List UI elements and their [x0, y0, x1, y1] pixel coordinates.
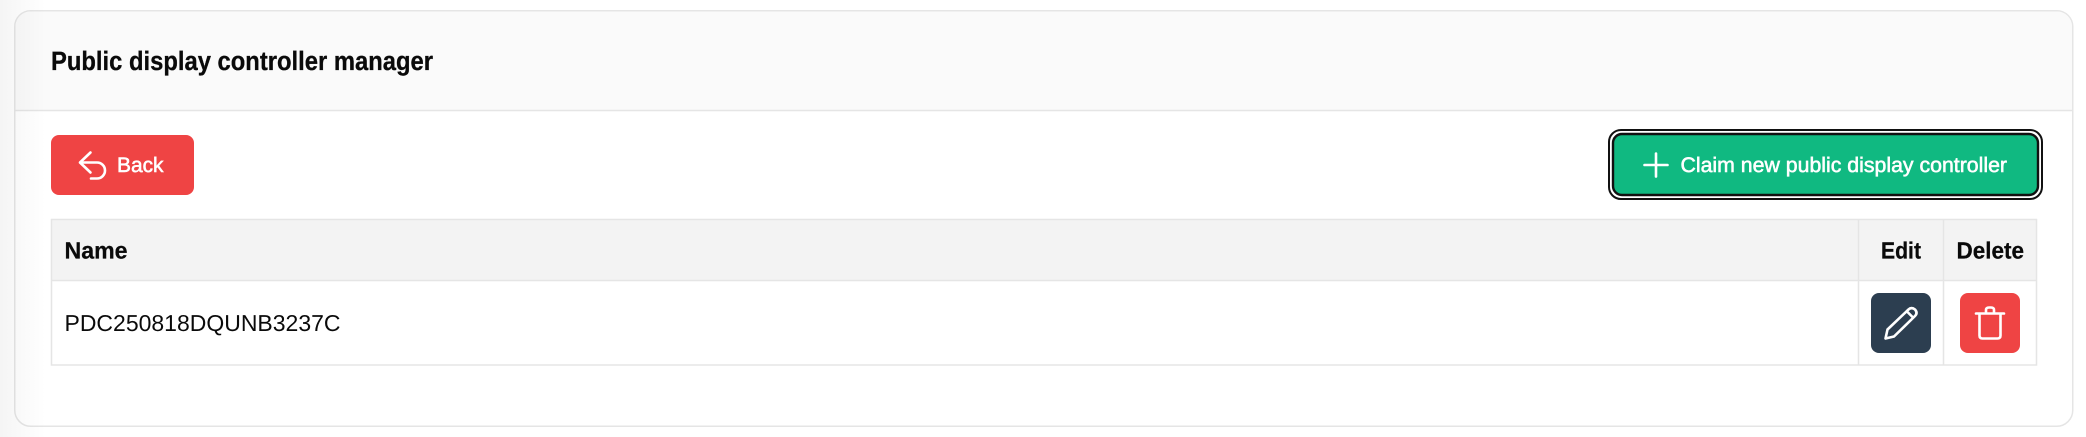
column header: edit: Edit	[1881, 238, 1921, 264]
icon: trash	[1976, 308, 2004, 338]
back label: Back	[117, 154, 164, 177]
row: controller name: PDC250818DQUNB3237C	[64, 310, 340, 336]
button: delete	[1960, 293, 2020, 353]
button: claim new public display controller	[1609, 130, 2042, 199]
column header: name: Name	[64, 238, 128, 264]
card header	[15, 12, 2072, 110]
button: edit	[1871, 293, 1931, 353]
table: controllers	[51, 219, 2037, 365]
claim label: Claim new public display controller	[1680, 154, 2007, 177]
icon: pencil	[1886, 308, 1916, 338]
button: back	[51, 135, 194, 195]
column header: delete: Delete	[1956, 238, 2024, 264]
icon: plus	[1644, 154, 1668, 176]
icon: back arrow	[80, 152, 105, 178]
title: Public display controller manager	[51, 46, 433, 76]
